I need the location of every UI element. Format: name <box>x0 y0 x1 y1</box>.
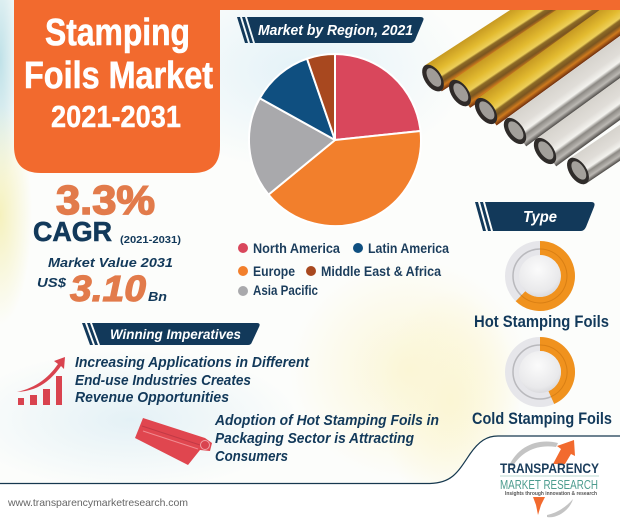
logo arrow top <box>553 440 575 464</box>
CAGR period: (2021-2031) <box>120 234 181 246</box>
heading: market by region: Market by Region, 2021 <box>258 22 413 39</box>
legend <box>238 241 449 298</box>
website: www.transparencymarketresearch.com <box>7 497 188 509</box>
unit: Bn <box>148 289 167 304</box>
legend: Europe <box>238 264 295 279</box>
heading: market by region <box>237 17 424 43</box>
text: imperative 1 <box>75 354 310 406</box>
gold roll 1 <box>422 10 556 92</box>
text: imperative 2: Consumers <box>215 448 288 465</box>
footer white area <box>0 436 620 522</box>
CAGR value: 3.3% <box>56 177 155 223</box>
photo: foil rolls <box>418 0 620 188</box>
slice: North America <box>335 54 420 140</box>
gold roll 3 <box>474 10 620 126</box>
text: imperative 1: Revenue Opportunities <box>75 389 229 406</box>
logo swoosh bottom <box>547 499 573 517</box>
logo swoosh top <box>509 442 558 466</box>
icon: growth chart <box>17 357 65 405</box>
text: imperative 2 <box>214 412 439 465</box>
text: imperative 1: End-use Industries Creates <box>75 372 251 389</box>
slice: Asia Pacific <box>249 98 335 195</box>
slice: Middle East and Africa <box>307 54 335 140</box>
legend: North America: North America <box>253 241 340 256</box>
gold roll 2 <box>449 10 600 108</box>
legend: Latin America: Latin America <box>368 241 449 256</box>
donut: cold stamping foils <box>505 337 575 407</box>
logo arrow bottom <box>533 497 545 515</box>
silver roll 2 <box>534 78 620 166</box>
silver roll 1 <box>504 36 620 146</box>
slice: Europe <box>268 131 421 226</box>
title panel <box>14 0 220 173</box>
logo <box>500 440 600 517</box>
legend: Middle East and Africa: Middle East & Africa <box>321 264 441 279</box>
text: imperative 1: Increasing Applications in Different <box>75 354 310 371</box>
silver roll 3 <box>567 124 620 184</box>
logo name: TRANSPARENCY <box>500 460 600 476</box>
currency: US$ <box>37 275 67 290</box>
heading: winning imperatives <box>82 323 260 345</box>
heading: winning imperatives: Winning Imperatives <box>110 326 241 342</box>
logo tagline: Insights through innovation & research <box>505 491 597 497</box>
legend: Europe: Europe <box>253 264 295 279</box>
CAGR block <box>33 177 181 247</box>
donut: hot stamping foils <box>505 241 575 311</box>
legend: Asia Pacific: Asia Pacific <box>253 283 318 298</box>
market value number: 3.10 <box>70 268 146 309</box>
market value block <box>37 255 173 309</box>
title line 1: Stamping <box>45 12 190 54</box>
market value label: Market Value 2031 <box>48 255 173 270</box>
text: imperative 2: Packaging Sector is Attracting <box>215 430 414 447</box>
icon: foil sheet roll <box>135 418 212 465</box>
title years: 2021-2031 <box>51 99 181 134</box>
slice: Latin America <box>260 59 335 140</box>
title line 2: Foils Market <box>24 55 213 97</box>
top accent bar <box>14 0 620 10</box>
heading: type <box>475 202 595 231</box>
pie chart: market by region <box>249 54 421 226</box>
heading: type: Type <box>523 209 557 226</box>
text: imperative 2: Adoption of Hot Stamping Foils in <box>214 412 439 429</box>
CAGR label: CAGR <box>33 216 112 247</box>
